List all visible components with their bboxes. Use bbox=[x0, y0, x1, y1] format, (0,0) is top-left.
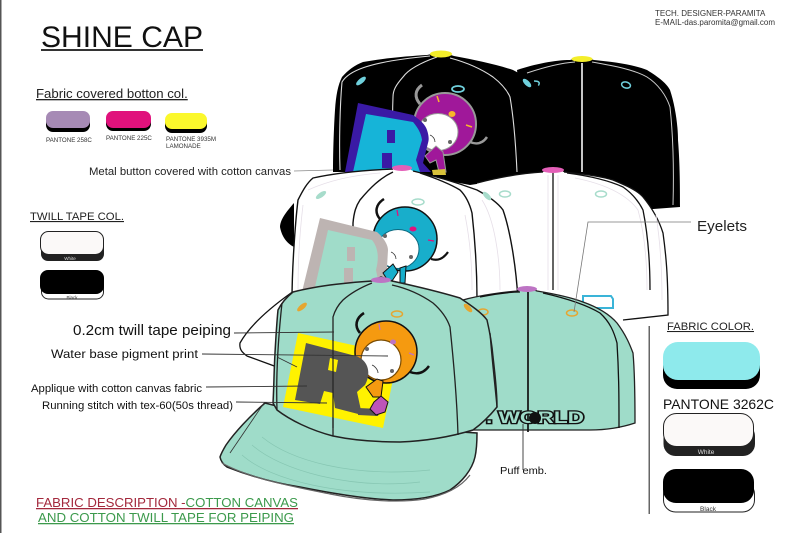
brim lower edge bbox=[222, 463, 470, 501]
swatch: Pantone 3935M: PANTONE 3935M bbox=[166, 136, 216, 143]
print: orange character arm bbox=[366, 379, 383, 397]
cap: black front view bbox=[333, 50, 557, 185]
label: twill tape peiping: 0.2cm twill tape peiping bbox=[73, 323, 231, 339]
heading: twill tape: TWILL TAPE COL. bbox=[30, 211, 124, 223]
designer credit: TECH. DESIGNER-PARAMITA bbox=[655, 9, 766, 18]
swatch: Pantone 225C: PANTONE 225C bbox=[106, 135, 152, 142]
swatch: Pantone 3935M bbox=[165, 113, 216, 150]
print: blue character head bbox=[373, 199, 448, 271]
print: orange character head bbox=[355, 313, 429, 383]
label: puff embroidery: Puff emb. bbox=[500, 465, 547, 477]
print: mitt bbox=[370, 396, 388, 415]
label: eyelets bbox=[574, 218, 747, 312]
label: running stitch bbox=[42, 400, 327, 453]
cap: white back view bbox=[477, 167, 668, 320]
label: metal button: Metal button covered with cotton canvas bbox=[89, 166, 291, 178]
fabric description: AND COTTON TWILL TAPE FOR PEIPING bbox=[38, 510, 294, 525]
label: applique bbox=[31, 357, 307, 395]
designer credit bbox=[655, 9, 775, 27]
label: puff embroidery bbox=[500, 424, 547, 477]
print: purple character arm bbox=[425, 146, 446, 172]
swatch: twill black bbox=[40, 270, 104, 300]
swatch: fabric aqua bbox=[663, 342, 760, 389]
print: R dot bbox=[358, 408, 380, 416]
cap: white front view bbox=[292, 165, 518, 310]
brim bbox=[220, 403, 477, 500]
right divider bbox=[648, 326, 650, 514]
swatch: Pantone 3935M: LAMONADE bbox=[166, 143, 201, 150]
puff embroidery: . WORLD bbox=[486, 408, 584, 427]
heading: button colours: Fabric covered botton col. bbox=[36, 86, 188, 101]
print: blue R bbox=[345, 103, 431, 172]
cap: teal back view bbox=[463, 286, 635, 432]
title: SHINE CAP bbox=[41, 21, 203, 54]
print: grey R bbox=[295, 343, 368, 415]
cap: black back view bbox=[517, 56, 680, 210]
print: grey R bbox=[300, 218, 395, 300]
print: yellow patch bbox=[283, 333, 398, 428]
fabric description: FABRIC DESCRIPTION - COTTON CANVAS bbox=[36, 495, 298, 510]
crown bbox=[273, 277, 497, 442]
print: purple character head bbox=[414, 85, 487, 155]
swatch: twill white bbox=[40, 232, 104, 261]
heading: fabric colour: FABRIC COLOR. bbox=[667, 321, 754, 333]
swatch: fabric black: Black bbox=[700, 506, 717, 513]
swatch: twill black: Black bbox=[66, 295, 78, 300]
label: pigment print: Water base pigment print bbox=[51, 347, 199, 361]
brim: black behind white cap bbox=[280, 203, 294, 247]
swatch: fabric black bbox=[663, 469, 754, 513]
swatch: twill white: White bbox=[64, 256, 76, 261]
swatch: fabric white bbox=[664, 414, 755, 456]
seam over print bbox=[332, 340, 334, 428]
label: applique: Applique with cotton canvas fabric bbox=[31, 383, 203, 395]
swatch: Pantone 258C: PANTONE 258C bbox=[46, 137, 92, 144]
print: blue character arm bbox=[383, 264, 406, 284]
designer credit: E-MAIL-das.paromita@gmail.com bbox=[655, 18, 775, 27]
swatch: fabric white: White bbox=[698, 449, 715, 456]
label: running stitch: Running stitch with tex-60(50s thread) bbox=[42, 400, 233, 412]
swatch: Pantone 258C bbox=[46, 111, 92, 144]
print: purple character foot bbox=[432, 169, 446, 175]
fabric description bbox=[36, 495, 298, 525]
label: Pantone 3262C: PANTONE 3262C bbox=[663, 396, 774, 412]
label: eyelets: Eyelets bbox=[697, 218, 747, 235]
brim: white cap brim behind teal bbox=[240, 293, 295, 367]
cap: teal front view bbox=[220, 277, 497, 501]
swatch: Pantone 225C bbox=[106, 111, 152, 142]
